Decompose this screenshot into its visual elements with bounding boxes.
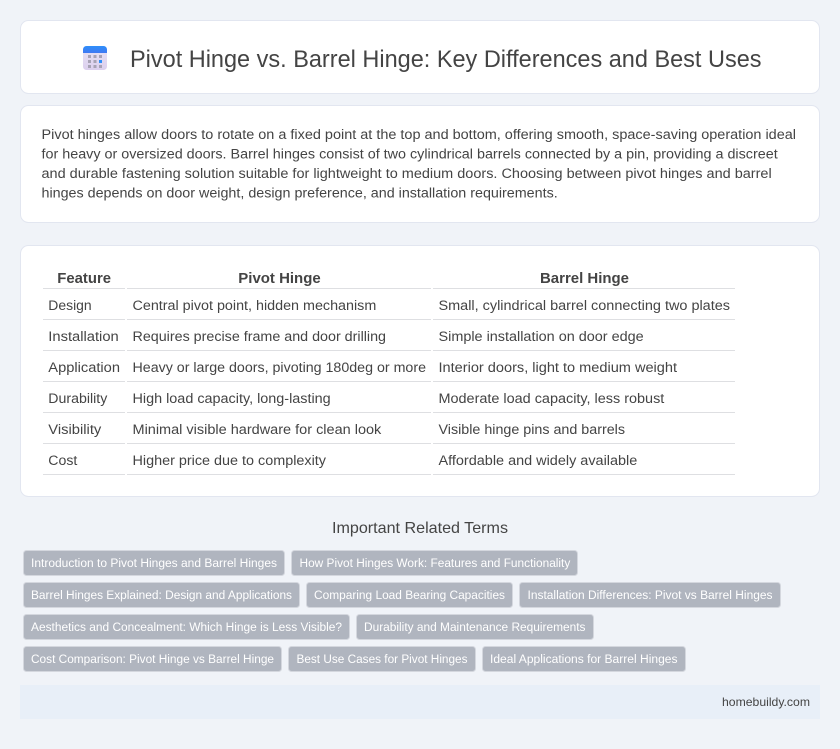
table row: durability: High load capacity, long-lasting — [132, 391, 331, 407]
table header row: Barrel Hinge — [540, 271, 629, 287]
icon: calendar — [83, 46, 107, 70]
table row: cost: Higher price due to complexity — [132, 453, 327, 469]
chip — [482, 646, 686, 672]
table row: cost: Affordable and widely available — [438, 453, 637, 469]
chip — [292, 550, 578, 576]
table row: durability — [48, 391, 664, 407]
text block: introduction paragraph: Pivot hinges allow doors to rotate on a fixed point at the top and bottom, offering smooth, space-saving operation ideal — [42, 127, 796, 143]
chip: How Pivot Hinges Work: Features and Functionality — [300, 556, 571, 570]
table row: cost — [48, 453, 637, 469]
table row: application: Heavy or large doors, pivoting 180deg or more — [132, 360, 426, 376]
table row: visibility — [48, 422, 625, 438]
table header row: Feature — [57, 271, 111, 287]
chip — [306, 582, 512, 608]
chip: Best Use Cases for Pivot Hinges — [296, 652, 468, 666]
footer — [20, 685, 820, 719]
text block: introduction paragraph: and durable fastening solution suitable for lightweight to medium doors. Choosing between pivot hinges and barrel — [42, 166, 772, 182]
table row: design — [48, 298, 730, 314]
chip — [24, 614, 350, 640]
chip — [24, 646, 282, 672]
panel: header — [20, 20, 820, 94]
chip: Installation Differences: Pivot vs Barrel Hinges — [528, 588, 772, 602]
text block: introduction paragraph: hinges depends on door weight, design preference, and installation requirements. — [42, 186, 558, 202]
chip: Ideal Applications for Barrel Hinges — [490, 652, 678, 666]
chip: Aesthetics and Concealment: Which Hinge is Less Visible? — [31, 620, 342, 634]
footer source text: homebuildy.com — [722, 695, 810, 709]
chip — [24, 582, 300, 608]
chip: Comparing Load Bearing Capacities — [314, 588, 505, 602]
text block: introduction paragraph: for heavy or oversized doors. Barrel hinges consist of two cylindrical barrels connected by a pin, providing a discreet — [42, 146, 778, 162]
heading: important related terms: Important Related Terms — [332, 520, 508, 537]
chip — [520, 582, 780, 608]
table row: cost: Cost — [48, 453, 77, 469]
table row: design: Central pivot point, hidden mechanism — [132, 298, 376, 314]
table row: installation — [48, 329, 644, 345]
table row: application: Interior doors, light to medium weight — [438, 360, 677, 376]
table header row: Pivot Hinge — [238, 271, 321, 287]
table row: installation: Simple installation on door edge — [438, 329, 644, 345]
panel: introduction — [20, 106, 820, 222]
table row: visibility: Minimal visible hardware for clean look — [132, 422, 382, 438]
panel: comparison table — [20, 246, 820, 496]
title: Pivot Hinge vs. Barrel Hinge: Key Differences and Best Uses — [130, 46, 762, 73]
table row: visibility: Visible hinge pins and barrels — [438, 422, 625, 438]
table row: application: Application — [48, 360, 120, 376]
table row: visibility: Visibility — [48, 422, 102, 438]
table header row — [57, 271, 629, 287]
table row: design: Small, cylindrical barrel connecting two plates — [438, 298, 730, 314]
related terms chips — [24, 550, 780, 672]
chip: Cost Comparison: Pivot Hinge vs Barrel Hinge — [31, 652, 274, 666]
chip — [288, 646, 476, 672]
table row: installation: Installation — [48, 329, 119, 345]
chip: Introduction to Pivot Hinges and Barrel Hinges — [31, 556, 277, 570]
chip: Durability and Maintenance Requirements — [364, 620, 586, 634]
table row: durability: Durability — [48, 391, 108, 407]
text block: introduction paragraph — [42, 127, 796, 202]
table row: design: Design — [48, 298, 92, 314]
table row: installation: Requires precise frame and door drilling — [132, 329, 386, 345]
table row: durability: Moderate load capacity, less robust — [438, 391, 664, 407]
chip: Barrel Hinges Explained: Design and Applications — [31, 588, 292, 602]
chip — [24, 550, 284, 576]
chip — [356, 614, 594, 640]
table row: application — [48, 360, 677, 376]
